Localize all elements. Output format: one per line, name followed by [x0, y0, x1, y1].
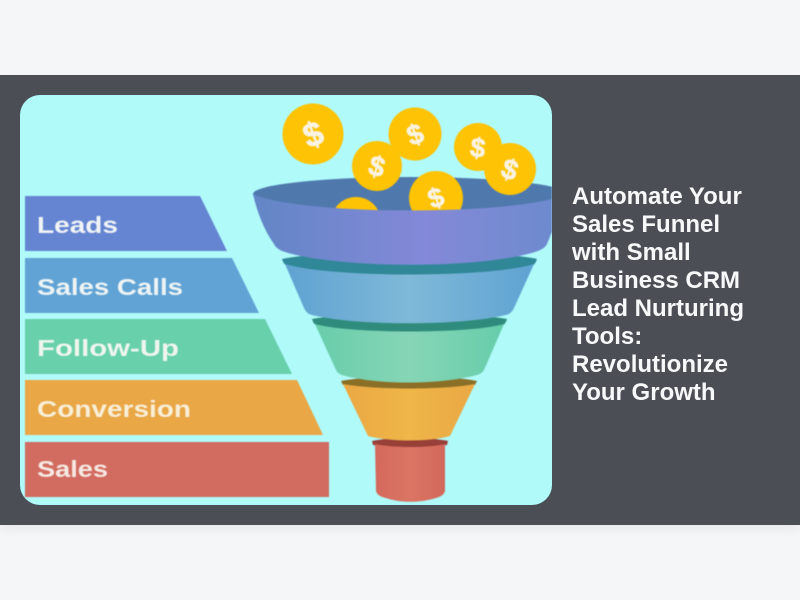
label bar: Sales	[25, 442, 329, 497]
icon: coin top left: $	[298, 114, 329, 156]
dark content band	[0, 75, 800, 525]
label bar: Leads	[25, 196, 227, 251]
funnel tier 5	[372, 438, 448, 502]
funnel tier 2	[282, 252, 537, 323]
icon: coin right back	[454, 123, 502, 171]
funnel tier 1	[253, 194, 567, 265]
icon: coin right front: $	[497, 152, 523, 187]
icon: coin right front	[484, 143, 536, 195]
panel: funnel illustration	[20, 95, 552, 505]
funnel tier 4	[341, 376, 477, 440]
title: Sales Funnel	[572, 211, 720, 238]
funnel tier 3	[312, 314, 507, 382]
label bar: Follow-Up: Follow-Up	[37, 335, 179, 361]
icon: coin top left	[282, 104, 344, 164]
title: Tools:	[572, 323, 642, 350]
funnel opening	[253, 177, 567, 211]
icon: coin middle	[352, 141, 402, 191]
label bar: Conversion: Conversion	[37, 396, 191, 422]
label bar: Sales Calls: Sales Calls	[37, 274, 183, 300]
title: Revolutionize	[572, 351, 728, 378]
icon: coin inside funnel centre	[409, 171, 463, 225]
icon: coin top centre	[388, 108, 442, 160]
label bar: Sales: Sales	[37, 456, 108, 482]
label bar: Conversion	[25, 380, 323, 435]
icon: coin right back: $	[468, 132, 487, 164]
icon: coin top centre: $	[403, 117, 428, 152]
icon: coin inside funnel centre: $	[424, 181, 448, 215]
title	[572, 183, 744, 406]
label bar: Follow-Up	[25, 319, 292, 374]
title: Lead Nurturing	[572, 295, 744, 322]
title: Business CRM	[572, 267, 740, 294]
icon: coin inside funnel left	[331, 197, 381, 247]
label bar: Leads: Leads	[37, 212, 118, 238]
icon: coin middle: $	[365, 149, 389, 184]
title: Your Growth	[572, 379, 716, 406]
title: with Small	[572, 239, 691, 266]
title: Automate Your	[572, 183, 742, 210]
label bar: Sales Calls	[25, 258, 259, 313]
